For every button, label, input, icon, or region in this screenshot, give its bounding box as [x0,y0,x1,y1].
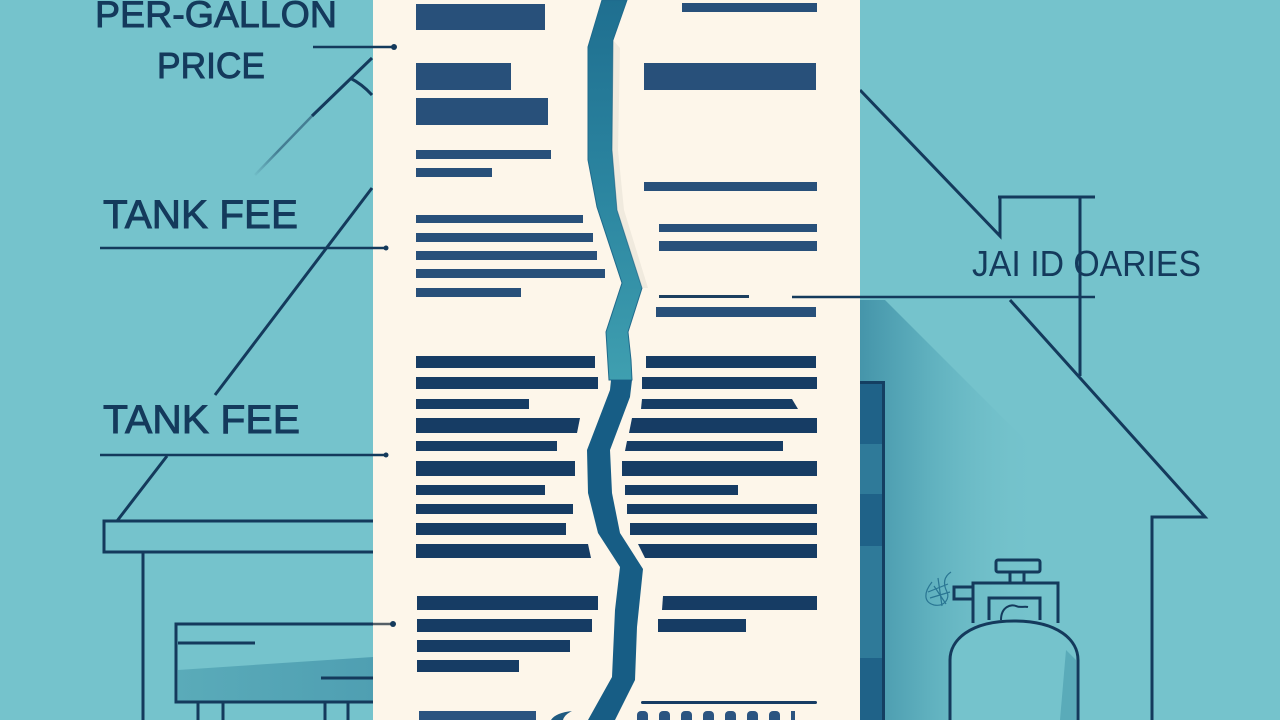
label: per-gallon price [95,0,337,86]
footer blocks [551,711,795,720]
table [176,624,373,720]
window strip [860,381,885,720]
house shadow [860,300,1040,720]
label: tank fee 1: TANK FEE [103,193,298,237]
left column lines [416,4,605,297]
crack upper [588,0,642,380]
right column lines lower [622,356,817,704]
receipt paper [373,0,860,720]
label: garbled right: JAI ID OARIES [972,243,1201,284]
label: per-gallon price: PRICE [157,45,265,86]
crack shadow [612,40,648,288]
house outline right [860,90,1205,720]
propane tank icon [926,560,1078,720]
right column lines [644,3,817,317]
left column lines lower [416,356,598,720]
leader lines [100,44,1095,627]
crack lower [587,380,643,720]
label: tank fee 2: TANK FEE [103,398,300,442]
house outline left [104,58,373,720]
